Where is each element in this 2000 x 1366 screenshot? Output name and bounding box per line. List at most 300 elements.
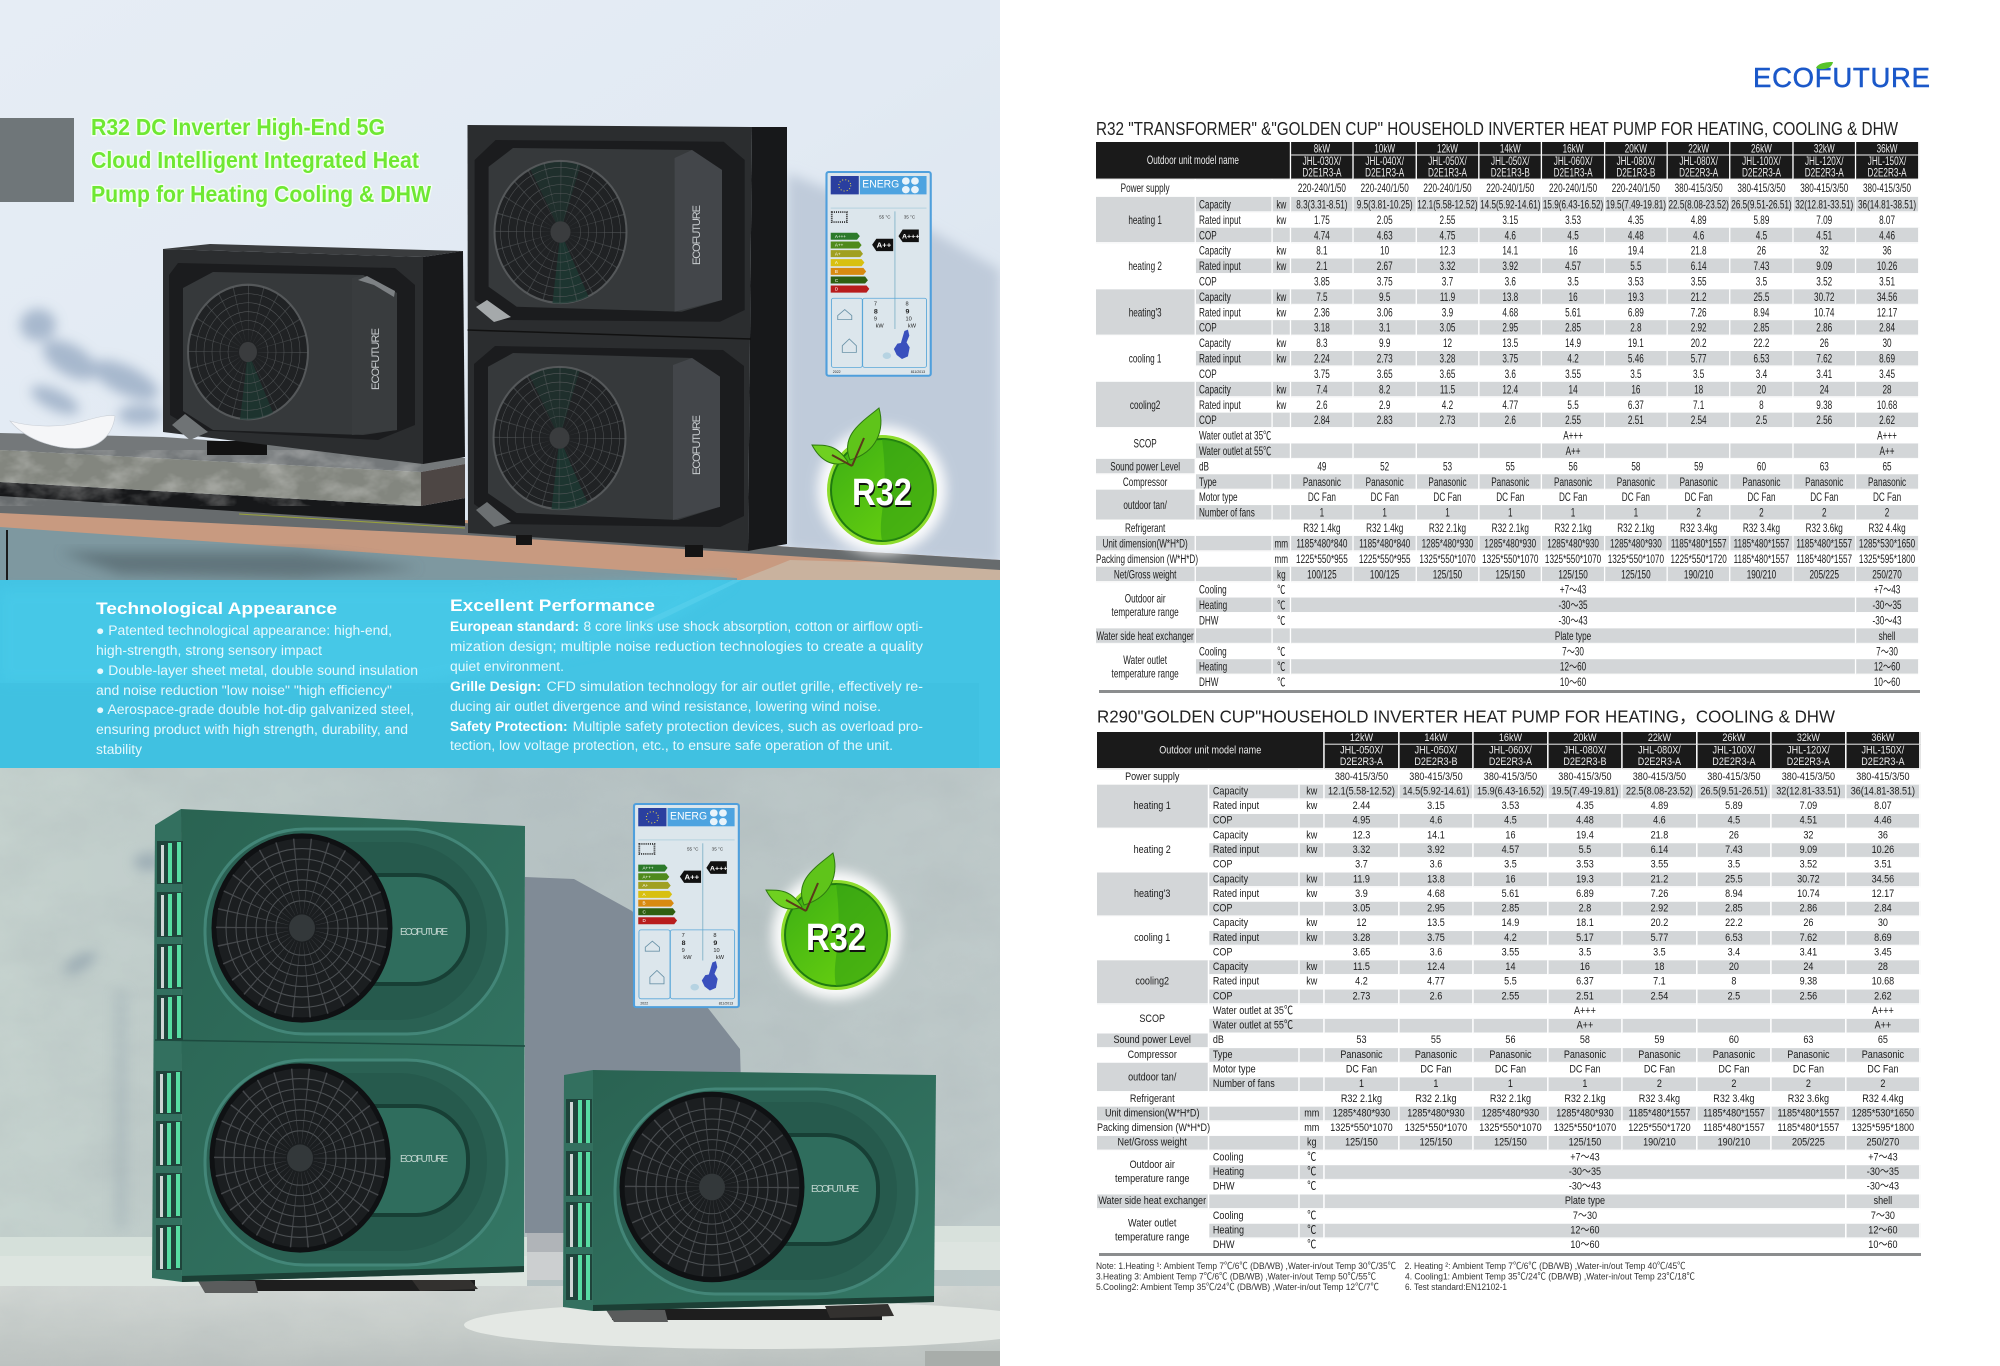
rows: heating 2: 10.26 — [1872, 843, 1894, 856]
rows: dimensions and weight: 1325*595*1800 — [1852, 1121, 1914, 1134]
rows: dimensions and weight: Net/Gross weight — [1118, 1136, 1187, 1149]
rows: heating 2 — [1128, 244, 1918, 288]
rows: cooling 1: 3.5 — [1693, 367, 1704, 380]
rows: heating 2: Rated input — [1213, 843, 1259, 856]
energy label: top scene: ENERG — [862, 178, 899, 190]
title: Pump for Heating Cooling & DHW — [91, 181, 432, 207]
rows: cooling 1: 5.77 — [1691, 351, 1707, 365]
row: sound power level — [1097, 1033, 1888, 1048]
row: refrigerant: Refrigerant — [1130, 1092, 1175, 1105]
energy label: top scene: A — [835, 260, 838, 265]
rows: outdoor air temperature range: -30～35 — [1867, 1165, 1899, 1178]
bullet list: and noise reduction "low noise" "high efficiency" — [96, 683, 392, 698]
floor — [0, 513, 999, 580]
row: water side heat exchanger: Water side heat exchanger — [1098, 1194, 1206, 1207]
energy label: bottom scene: A++ — [642, 874, 651, 879]
rows: heating 2: 6.14 — [1691, 259, 1707, 273]
header rows: JHL-080X/ — [1638, 743, 1681, 756]
rows: heating 1 — [1097, 784, 1921, 828]
rows: SCOP — [1134, 429, 1918, 459]
row: compressor: Compressor — [1128, 1048, 1177, 1061]
rows: water outlet temperature range: 12～60 — [1560, 660, 1586, 673]
rows: heating 2: 2.67 — [1377, 259, 1393, 273]
rows: heating 2: 32 — [1803, 828, 1813, 841]
rows: heating 3: 7.26 — [1651, 887, 1668, 900]
rows: water outlet temperature range: 12～60 — [1570, 1224, 1600, 1236]
rows: dimensions and weight: 190/210 — [1718, 1136, 1750, 1149]
R32 badge: bottom scene — [766, 853, 900, 999]
rows: cooling 1: 8.69 — [1874, 931, 1892, 944]
rows: outdoor air temperature range: ℃ — [1277, 613, 1285, 627]
rows: heating 3: 3.05 — [1440, 321, 1455, 334]
footnotes: 2. Heating ²: Ambient Temp 7℃/6℃ (DB/WB) ,Water-in/out Temp 40℃/45℃ — [1405, 1261, 1686, 1272]
rows: SCOP: Water outlet at 55℃ — [1199, 444, 1271, 457]
rows: heating 3: 9.5 — [1379, 290, 1390, 303]
rows: heating 1: Capacity — [1213, 785, 1248, 797]
row: refrigerant: R32 4.4kg — [1862, 1092, 1904, 1105]
rows: heating 3: 7.5 — [1316, 290, 1328, 303]
rows: outdoor air temperature range: -30～35 — [1569, 1165, 1601, 1178]
rows: heating 1: 4.95 — [1353, 814, 1370, 827]
body copy: quiet environment. — [450, 659, 564, 674]
rows: dimensions and weight: 1225*550*1720 — [1628, 1121, 1691, 1134]
rows: cooling 2: COP — [1213, 989, 1233, 1002]
rows: cooling 1: 3.55 — [1565, 367, 1581, 380]
rows: heating 3: kw — [1306, 887, 1317, 900]
header rows: JHL-080X/ — [1679, 155, 1718, 168]
rows: heating 1: 4.5 — [1567, 228, 1579, 242]
rows: cooling 2: Capacity — [1199, 382, 1231, 396]
row: power supply: 380-415/3/50 — [1675, 181, 1723, 194]
rows: heating 2: 6.14 — [1651, 843, 1668, 856]
header rows: 14kW — [1500, 142, 1521, 155]
energy label: top scene: 8 — [874, 309, 878, 316]
rows: cooling 1: 3.41 — [1800, 946, 1817, 958]
brand mark: ECOFUTURE — [691, 415, 703, 475]
rows: dimensions and weight: mm — [1275, 536, 1288, 550]
rows: dimensions and weight: 100/125 — [1307, 567, 1337, 581]
rows: heating 2: kw — [1306, 843, 1317, 856]
row: sound power level: 65 — [1878, 1033, 1888, 1046]
rows: heating 1: 14.5(5.92-14.61) — [1480, 197, 1540, 211]
rows: cooling 1: Rated input — [1213, 931, 1259, 944]
row: power supply — [1121, 180, 1920, 194]
rows: heating 1: heating 1 — [1134, 799, 1171, 812]
rows: heating 1: 4.35 — [1576, 799, 1594, 812]
energy label: bottom scene: 8 — [682, 940, 686, 947]
row: power supply: 380-415/3/50 — [1484, 769, 1537, 782]
rows: cooling 1: 3.5 — [1630, 367, 1642, 380]
rows: dimensions and weight: 190/210 — [1747, 567, 1776, 581]
rows: outdoor fan: DC Fan — [1495, 1063, 1526, 1075]
rows: cooling 2: 2.51 — [1576, 989, 1594, 1002]
rows: cooling 2: 4.2 — [1442, 398, 1453, 411]
rows: heating 1: COP — [1213, 814, 1233, 827]
rows: heating 3: 12.17 — [1872, 887, 1894, 900]
rows: cooling 2: 2.55 — [1502, 989, 1519, 1002]
rows: heating 2: 8.1 — [1316, 244, 1328, 257]
rows: cooling 2: 11.5 — [1440, 382, 1455, 396]
header rows: D2E2R3-A — [1489, 755, 1532, 768]
rows: heating 1: 14.5(5.92-14.61) — [1403, 785, 1469, 797]
rows: heating 1: 36(14.81-38.51) — [1851, 785, 1915, 797]
rows: cooling 1: cooling 1 — [1129, 351, 1161, 365]
rows: cooling 1: 5.17 — [1576, 931, 1594, 944]
rows: cooling 2: 16 — [1631, 382, 1640, 396]
rows: heating 2: 26 — [1757, 244, 1766, 257]
rows: cooling 1: 3.6 — [1430, 946, 1442, 958]
row: water side heat exchanger — [1097, 1194, 1921, 1209]
rows: water outlet temperature range: ℃ — [1277, 644, 1285, 658]
rows: cooling 2: 2.56 — [1800, 989, 1817, 1002]
wall stains — [61, 853, 162, 1230]
energy label: bottom scene: 811/2013 — [719, 1002, 733, 1005]
rows: cooling 1: 7.62 — [1816, 351, 1832, 365]
rows: cooling 1: 7.62 — [1800, 931, 1817, 944]
rows: heating 1: 4.48 — [1628, 228, 1644, 242]
rows: heating 1: 15.9(6.43-16.52) — [1543, 197, 1603, 211]
row: sound power level: 58 — [1631, 459, 1640, 473]
rows: heating 2: heating 2 — [1134, 843, 1171, 856]
rows: cooling 2: 18 — [1694, 382, 1703, 396]
row: refrigerant: R32 2.1kg — [1490, 1092, 1531, 1105]
rows: heating 2: 9.09 — [1816, 259, 1832, 273]
rows: heating 2: 36 — [1883, 244, 1892, 257]
rows: cooling 1: 26 — [1803, 916, 1813, 929]
rows: SCOP: A+++ — [1872, 1004, 1894, 1017]
rows: dimensions and weight: 125/150 — [1420, 1136, 1452, 1149]
header rows: Outdoor unit model name — [1159, 743, 1261, 756]
rows: heating 3: 13.8 — [1502, 290, 1518, 303]
rows: dimensions and weight: 1225*550*955 — [1359, 552, 1411, 565]
rows: cooling 1: 22.2 — [1725, 916, 1743, 929]
header rows: 8kW — [1314, 142, 1330, 155]
rows: heating 1: kw — [1306, 785, 1317, 797]
rows: heating 1: 4.6 — [1693, 228, 1704, 242]
rows: outdoor air temperature range: +7～43 — [1570, 1150, 1600, 1163]
rows: cooling 2: 2.56 — [1816, 413, 1832, 427]
rows: water outlet temperature range: ℃ — [1307, 1238, 1316, 1251]
energy label: top scene: 35 °C — [904, 215, 916, 220]
energy label: top scene: A++ — [877, 241, 892, 249]
rows: heating 1: heating 1 — [1128, 213, 1162, 226]
rows: cooling 2: 9.38 — [1816, 398, 1832, 411]
rows: cooling 2: 24 — [1803, 960, 1813, 973]
rows: heating 3: 4.68 — [1502, 305, 1518, 319]
row: power supply: 220-240/1/50 — [1423, 181, 1472, 194]
rows: heating 3: 11.9 — [1440, 290, 1455, 303]
rows: heating 3: 25.5 — [1725, 872, 1743, 885]
rows: cooling 1: kw — [1276, 351, 1286, 365]
body copy: Safety Protection: — [450, 719, 568, 734]
rows: cooling 2: 2.62 — [1874, 989, 1892, 1002]
rows: heating 1: 7.09 — [1816, 213, 1832, 226]
rows: water outlet temperature range: ℃ — [1307, 1209, 1316, 1222]
rows: outdoor air temperature range: Cooling — [1213, 1150, 1244, 1163]
row: compressor: Panasonic — [1617, 475, 1655, 488]
row: sound power level: 56 — [1569, 459, 1578, 473]
rows: heating 3: 2.36 — [1314, 305, 1330, 319]
rows: cooling 1: 3.4 — [1756, 367, 1767, 380]
rows: cooling 1: 14.9 — [1502, 916, 1519, 929]
rows: dimensions and weight: 1185*480*840 — [1296, 536, 1347, 550]
row: power supply — [1125, 769, 1920, 782]
rows: heating 1: 1.75 — [1314, 213, 1330, 226]
row: water side heat exchanger: Water side heat exchanger — [1097, 629, 1194, 642]
rows: water outlet temperature range — [1115, 1209, 1921, 1251]
rows: heating 3: 2.85 — [1502, 902, 1519, 914]
rows: heating 2: 7.43 — [1725, 843, 1743, 856]
rows: cooling 1: 3.45 — [1879, 367, 1895, 380]
rows: water outlet temperature range: temperature range — [1115, 1230, 1189, 1243]
header rows: 16kW — [1499, 731, 1522, 744]
rows: dimensions and weight: 125/150 — [1494, 1136, 1527, 1149]
rows: heating 3 — [1097, 872, 1921, 916]
rows: cooling 2: 2.73 — [1353, 989, 1370, 1002]
R32 badge: bottom scene: R32 — [806, 917, 866, 959]
rows: heating 3: 5.61 — [1502, 887, 1519, 900]
rows: heating 3: 3.9 — [1355, 887, 1368, 900]
rows: cooling 2: 28 — [1883, 382, 1892, 396]
energy label: top scene: B — [835, 269, 838, 274]
row: sound power level: Sound power Level — [1110, 459, 1180, 473]
rows: heating 2: 3.5 — [1504, 858, 1517, 870]
rows: heating 3: 3.05 — [1353, 902, 1370, 914]
rows: cooling 1: 8.3 — [1316, 336, 1328, 350]
brand mark: ECOFUTURE — [811, 1184, 859, 1195]
row: refrigerant: R32 3.4kg — [1639, 1092, 1680, 1105]
rows: heating 3: 5.61 — [1565, 305, 1581, 319]
header rows: JHL-100X/ — [1713, 743, 1755, 756]
rows: heating 2: 3.7 — [1355, 858, 1368, 870]
header rows: D2E2R3-A — [1861, 755, 1905, 768]
row: sound power level: 59 — [1654, 1033, 1664, 1046]
row: water side heat exchanger: Plate type — [1565, 1194, 1605, 1207]
rows: cooling 2: 9.38 — [1800, 975, 1817, 988]
header rows — [1096, 142, 1920, 180]
rows: heating 2: 12.3 — [1353, 828, 1370, 841]
rows: cooling 1: 5.46 — [1628, 351, 1644, 365]
rows: cooling 1: 3.28 — [1353, 931, 1370, 944]
rows: heating 1: 7.09 — [1800, 799, 1817, 812]
rows: heating 2: 3.5 — [1756, 274, 1767, 288]
rows: heating 1: 3.15 — [1502, 213, 1518, 226]
header rows: D2E2R3-A — [1868, 166, 1907, 180]
header rows: D2E2R3-A — [1712, 755, 1756, 768]
single green heat pump — [563, 1070, 936, 1322]
energy label: bottom scene: 8 — [713, 933, 717, 939]
rows: cooling 2: 18 — [1654, 960, 1664, 973]
energy label: top scene: 55 °C — [879, 215, 891, 220]
rows: heating 3: 4.68 — [1427, 887, 1445, 900]
header rows: 26kW — [1722, 731, 1745, 744]
rows: SCOP: A++ — [1880, 444, 1895, 457]
row: power supply: 380-415/3/50 — [1782, 769, 1835, 782]
rows: cooling 1: 3.55 — [1502, 946, 1519, 958]
rows: heating 2: 3.55 — [1651, 858, 1668, 870]
rows: outdoor fan: DC Fan — [1622, 490, 1650, 504]
rows: dimensions and weight: 205/225 — [1792, 1136, 1825, 1149]
heading: R290 table: R290"GOLDEN CUP"HOUSEHOLD INVERTER HEAT PUMP FOR HEATING，COOLING & DHW — [1097, 707, 1835, 727]
rows: dimensions and weight: 1285*480*930 — [1482, 1107, 1539, 1119]
bullet list: ● Double-layer sheet metal, double sound insulation — [96, 663, 418, 678]
table: R32 specifications — [1096, 142, 1920, 689]
header rows: JHL-150X/ — [1868, 155, 1906, 168]
rows: heating 3: 8.94 — [1725, 887, 1743, 900]
rows: cooling 2: 2.54 — [1691, 413, 1707, 427]
rows: heating 1: 3.53 — [1565, 213, 1581, 226]
rows: cooling 2: 8 — [1759, 398, 1764, 411]
rows: outdoor fan: DC Fan — [1346, 1063, 1377, 1075]
rows: dimensions and weight: kg — [1277, 567, 1286, 581]
rows: cooling 1: kw — [1306, 916, 1317, 929]
rows: cooling 1: COP — [1199, 367, 1217, 380]
row: compressor: Panasonic — [1564, 1048, 1606, 1061]
rows: heating 3: 2.8 — [1630, 321, 1642, 334]
rows: heating 2: 19.4 — [1576, 828, 1594, 841]
rows: heating 3: COP — [1213, 902, 1233, 914]
rows: outdoor fan: DC Fan — [1873, 490, 1901, 504]
footnotes: 5.Cooling2: Ambient Temp 35℃/24℃ (DB/WB) ,Water-in/out Temp 12℃/7℃ — [1096, 1282, 1379, 1293]
row: power supply: 380-415/3/50 — [1633, 769, 1686, 782]
rows: outdoor fan: DC Fan — [1433, 490, 1462, 504]
brand mark: ECOFUTURE — [691, 205, 703, 265]
row: refrigerant: R32 3.6kg — [1806, 521, 1843, 534]
bullet list — [96, 623, 418, 757]
rows: heating 1: 4.6 — [1653, 814, 1666, 827]
rows: outdoor fan — [1096, 490, 1918, 520]
energy label: top scene: 9 — [905, 309, 910, 316]
energy label: bottom scene — [634, 804, 739, 1007]
rows: heating 2: 3.55 — [1691, 274, 1707, 288]
rows: dimensions and weight: 1325*550*1070 — [1405, 1121, 1467, 1134]
footnotes — [1096, 1261, 1695, 1293]
rows: cooling 2 — [1096, 382, 1920, 428]
row: refrigerant: R32 3.4kg — [1713, 1092, 1755, 1105]
body copy: Grille Design: — [450, 679, 541, 694]
rows: water outlet temperature range: Heating — [1199, 660, 1227, 673]
rows: heating 1: 8.07 — [1874, 799, 1892, 812]
rows: heating 3 — [1096, 289, 1920, 336]
bullet list: ● Patented technological appearance: high-end, — [96, 623, 392, 638]
rows: outdoor fan: DC Fan — [1718, 1063, 1749, 1075]
rows: dimensions and weight: 1325*550*1070 — [1482, 552, 1538, 565]
rows: dimensions and weight: 1185*480*1557 — [1778, 1121, 1839, 1134]
rows: dimensions and weight: 1325*550*1070 — [1545, 552, 1601, 565]
rows: heating 1: 22.5(8.08-23.52) — [1668, 197, 1729, 211]
row: power supply: 380-415/3/50 — [1558, 769, 1612, 782]
rows: SCOP: A++ — [1577, 1019, 1593, 1031]
rows: water outlet temperature range: 7～30 — [1871, 1209, 1895, 1222]
rows: outdoor fan: DC Fan — [1569, 1063, 1601, 1075]
rows: heating 3: 34.56 — [1872, 872, 1894, 885]
rows: water outlet temperature range: 10～60 — [1560, 675, 1586, 689]
row: sound power level: Sound power Level — [1114, 1033, 1191, 1046]
rows: water outlet temperature range: Cooling — [1213, 1209, 1244, 1222]
row: power supply: 380-415/3/50 — [1856, 769, 1910, 782]
rows: heating 3: 13.8 — [1427, 872, 1445, 885]
row: sound power level: 63 — [1820, 459, 1829, 473]
rows: cooling 2: 7.1 — [1653, 975, 1666, 988]
rows: dimensions and weight: 1185*480*1557 — [1671, 536, 1726, 550]
rows: outdoor fan: outdoor tan/ — [1128, 1070, 1176, 1083]
rows: heating 2: Capacity — [1199, 244, 1231, 257]
rows: dimensions and weight: 125/150 — [1496, 567, 1525, 581]
row: refrigerant: R32 2.1kg — [1415, 1092, 1457, 1105]
brand mark: ECOFUTURE — [370, 328, 382, 390]
rows: heating 2: 36 — [1878, 828, 1888, 841]
rows: heating 1: 12.1(5.58-12.52) — [1328, 785, 1395, 797]
energy label: top scene: C — [835, 278, 839, 283]
body copy: tection, low voltage protection, etc., to ensure safe operation of the unit. — [450, 738, 893, 753]
rows: cooling 2: 2.55 — [1565, 413, 1581, 427]
rows: heating 1: 4.51 — [1816, 228, 1832, 242]
energy label: bottom scene: A++ — [684, 872, 700, 881]
rows: cooling 1: 18.1 — [1576, 916, 1594, 929]
rows: SCOP: Water outlet at 35℃ — [1199, 429, 1271, 442]
rows: heating 3: kw — [1276, 290, 1286, 303]
row: compressor: Panasonic — [1787, 1048, 1830, 1061]
rows: water outlet temperature range — [1112, 644, 1920, 689]
row: sound power level: 60 — [1729, 1033, 1739, 1046]
row: refrigerant: R32 2.1kg — [1617, 521, 1654, 534]
row: power supply: 220-240/1/50 — [1612, 181, 1660, 194]
rows: heating 1: 4.74 — [1314, 228, 1330, 242]
rows: outdoor air temperature range: Outdoor air — [1130, 1158, 1175, 1171]
rows: SCOP: Water outlet at 35℃ — [1213, 1004, 1293, 1017]
row: compressor: Panasonic — [1862, 1048, 1904, 1061]
rows: heating 1: 4.46 — [1879, 228, 1895, 242]
text block: excellent performance — [450, 596, 923, 753]
rows: dimensions and weight: 1285*530*1650 — [1859, 536, 1915, 550]
rows: SCOP: Water outlet at 55℃ — [1213, 1019, 1293, 1031]
rows: outdoor air temperature range: -30～43 — [1867, 1180, 1899, 1192]
rows: cooling 2: 12.4 — [1427, 960, 1445, 973]
row: compressor: Panasonic — [1805, 475, 1843, 488]
rows: heating 1: 4.48 — [1576, 814, 1594, 827]
rows: outdoor air temperature range: +7～43 — [1560, 583, 1586, 596]
rows: heating 1: 36(14.81-38.51) — [1858, 197, 1916, 211]
rows: heating 2: 21.8 — [1651, 828, 1668, 841]
rows: dimensions and weight: 1285*480*930 — [1556, 1107, 1614, 1119]
rows: dimensions and weight: 1185*480*1557 — [1629, 1107, 1690, 1119]
rows: outdoor air temperature range: -30～35 — [1873, 598, 1902, 612]
header rows: JHL-050X/ — [1491, 155, 1530, 168]
header rows: 22kW — [1688, 142, 1709, 155]
rows: cooling 1: 20.2 — [1691, 336, 1707, 350]
rows: outdoor air temperature range: DHW — [1213, 1180, 1235, 1192]
rows: heating 1: 26.5(9.51-26.51) — [1700, 785, 1767, 797]
energy label: top scene: D — [835, 287, 838, 292]
rows: heating 3: 16 — [1569, 290, 1578, 303]
energy label: bottom scene: A+++ — [710, 865, 727, 872]
rows: outdoor air temperature range: -30～35 — [1559, 598, 1588, 612]
rows: cooling 1: 3.6 — [1505, 367, 1516, 380]
header rows: JHL-060X/ — [1489, 743, 1532, 756]
rows: dimensions and weight: 1325*550*1070 — [1479, 1121, 1542, 1134]
rows: outdoor air temperature range: ℃ — [1307, 1180, 1316, 1192]
rows: water outlet temperature range: 7～30 — [1573, 1209, 1597, 1222]
rows: outdoor air temperature range: ℃ — [1277, 598, 1285, 612]
rows: dimensions and weight: 1325*595*1800 — [1859, 552, 1915, 565]
rows: cooling 1: 4.2 — [1504, 931, 1517, 944]
rows: cooling 2: 4.77 — [1502, 398, 1518, 411]
header rows: 32kW — [1797, 731, 1820, 744]
rows: cooling 1 — [1134, 916, 1921, 958]
rows: cooling 1: 9.9 — [1379, 336, 1390, 350]
rows: cooling 1: 3.5 — [1653, 946, 1666, 958]
rows: cooling 2: 5.5 — [1567, 398, 1579, 411]
